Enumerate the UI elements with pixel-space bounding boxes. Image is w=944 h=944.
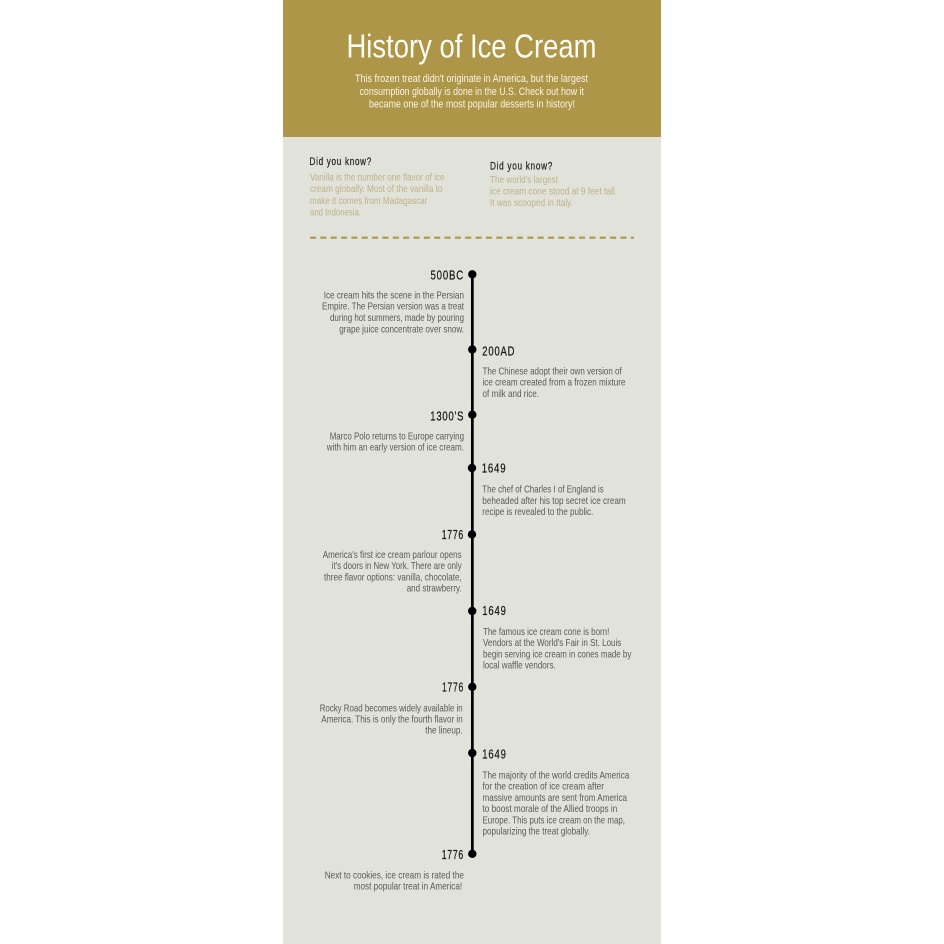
- event: 1776 rocky road: America. This is only the fourth flavor in: [321, 714, 463, 726]
- event: 200AD: The Chinese adopt their own version of: [482, 366, 622, 377]
- event: 500BC: [322, 268, 476, 335]
- event: 1649 cone: The famous ice cream cone is born!: [483, 627, 609, 638]
- event: 500BC: Empire. The Persian version was a treat: [322, 302, 464, 313]
- panel: did you know left: [310, 156, 445, 218]
- event: 1649 cone: Vendors at the World's Fair in St. Louis: [483, 638, 621, 649]
- event: 1300'S: [326, 409, 476, 454]
- heading: Did you know?: [310, 156, 372, 168]
- event: 1776 rocky road: Rocky Road becomes widely available in: [320, 703, 463, 714]
- event: 500BC: Ice cream hits the scene in the Persian: [324, 290, 464, 302]
- event: 1776 rocky road: 1776: [442, 681, 464, 695]
- event: 1649 charles: recipe is revealed to the public.: [482, 507, 593, 518]
- event: 1776 parlour: it's doors in New York. There are only: [332, 561, 462, 572]
- timeline axis: [471, 274, 474, 854]
- intro text: became one of the most popular desserts in history!: [369, 98, 575, 110]
- event: 1649 cone: begin serving ice cream in cones made by: [483, 649, 632, 660]
- event: 1776 cookies: [325, 848, 476, 892]
- title: History of Ice Cream: [346, 28, 596, 64]
- panel: header: [283, 0, 661, 137]
- intro text: [355, 73, 588, 110]
- event: 1649 allied: [468, 748, 630, 838]
- event: 500BC: 500BC: [430, 268, 464, 282]
- intro text: consumption globally is done in the U.S. Check out how it: [360, 86, 584, 98]
- event: 1300'S: Marco Polo returns to Europe carrying: [330, 431, 464, 442]
- event: 1776 cookies: Next to cookies, ice cream is rated the: [325, 870, 464, 881]
- event: 500BC: during hot summers, made by pouring: [330, 313, 464, 324]
- event: 1776 parlour: and strawberry.: [407, 584, 462, 595]
- event: 200AD: 200AD: [482, 345, 515, 359]
- event: 200AD: of milk and rice.: [482, 389, 539, 400]
- fact text: The world's largest: [490, 175, 558, 186]
- event: 1300'S: with him an early version of ice cream.: [326, 442, 464, 454]
- event: 1649 charles: beheaded after his top secret ice cream: [482, 496, 626, 507]
- event: 1300'S: 1300'S: [430, 409, 464, 423]
- event: 500BC: grape juice concentrate over snow.: [339, 324, 464, 335]
- event: 1776 parlour: America's first ice cream parlour opens: [323, 550, 462, 561]
- event: 1649 cone: local waffle vendors.: [483, 660, 556, 672]
- event: 1776 parlour: 1776: [442, 528, 464, 542]
- event: 1776 cookies: most popular treat in America!: [354, 882, 462, 892]
- event: 1649 cone: 1649: [482, 604, 507, 618]
- event: 1649 allied: Europe. This puts ice cream on the map,: [482, 815, 625, 826]
- panel: page background: [283, 0, 661, 944]
- event: 1649 charles: 1649: [482, 462, 506, 476]
- event: 1776 rocky road: [320, 681, 476, 737]
- event: 1649 allied: to boost morale of the Allied troops in: [482, 804, 617, 815]
- panel: did you know right: [490, 160, 617, 209]
- fact text: [490, 175, 617, 209]
- event: 200AD: ice cream created from a frozen mixture: [482, 378, 626, 389]
- event: 1776 parlour: three flavor options: vanilla, chocolate,: [324, 572, 462, 584]
- fact text: cream globally. Most of the vanilla to: [310, 184, 443, 195]
- event: 1776 parlour: [323, 528, 476, 595]
- event: 1649 allied: massive amounts are sent from America: [482, 793, 627, 804]
- heading: Did you know?: [490, 160, 553, 172]
- event: 1649 allied: popularizing the treat globally.: [482, 826, 590, 838]
- event: 1649 charles: [468, 462, 626, 518]
- fact text: Vanilla is the number one flavor of ice: [310, 172, 445, 184]
- event: 1776 rocky road: the lineup.: [425, 726, 463, 737]
- fact text: make it comes from Madagascar: [310, 196, 428, 207]
- fact text: ice cream cone stood at 9 feet tall.: [490, 186, 617, 198]
- event: 1649 allied: for the creation of ice cream after: [482, 782, 604, 792]
- event: 1649 charles: The chef of Charles I of England is: [482, 485, 604, 496]
- intro text: This frozen treat didn't originate in America, but the largest: [355, 73, 588, 85]
- event: 1649 allied: The majority of the world credits America: [482, 770, 630, 781]
- timeline: [320, 268, 632, 892]
- fact text: It was scooped in Italy.: [490, 198, 573, 209]
- event: 1649 allied: 1649: [482, 748, 507, 762]
- fact text: [310, 172, 445, 218]
- event: 200AD: [468, 345, 626, 400]
- event: 1776 cookies: 1776: [442, 848, 464, 862]
- fact text: and Indonesia.: [310, 208, 361, 218]
- event: 1649 cone: [468, 604, 632, 672]
